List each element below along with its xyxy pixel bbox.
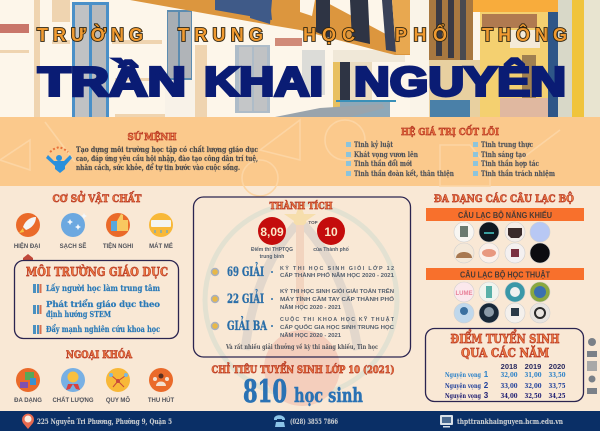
- enrolment target: [212, 362, 394, 410]
- extracurricular labels: QUY MÔ: [106, 396, 130, 404]
- panel: educational environment: [14, 260, 178, 338]
- table of admission scores: 1: [484, 370, 489, 379]
- extracurricular labels: CHẤT LƯỢNG: [52, 397, 94, 404]
- heading: extracurricular: NGOẠI KHÓA: [66, 347, 133, 361]
- panel: achievements: [194, 197, 410, 357]
- award row: third prize: NĂM HỌC 2020 - 2021: [280, 332, 341, 339]
- stat: top 10 in city: của Thành phố: [313, 246, 349, 253]
- heading: achievements: THÀNH TÍCH: [270, 200, 333, 212]
- values list: Tinh sáng tạo: [481, 150, 526, 159]
- award row: 22 prizes: 22 GIẢI: [227, 289, 264, 307]
- values list: Tinh thần đoàn kết, thân thiện: [354, 169, 454, 178]
- icon: network: [106, 368, 130, 392]
- table of admission scores: [445, 362, 566, 400]
- award row: 22 prizes: [212, 287, 394, 311]
- bar: academic clubs: [426, 268, 584, 280]
- table of admission scores: 2: [484, 381, 489, 390]
- table of admission scores: 2018: [501, 362, 517, 371]
- enrolment heading: CHỈ TIÊU TUYỂN SINH LỚP 10 (2021): [212, 362, 394, 376]
- bar: talent clubs: CÂU LẠC BỘ NĂNG KHIẾU: [458, 210, 552, 220]
- title: school type line: HỌC: [303, 25, 355, 45]
- enrolment number: 810: [243, 374, 287, 410]
- heading: admission scores: QUA CÁC NĂM: [461, 344, 549, 360]
- award row: third prize: [212, 315, 395, 339]
- table of admission scores: 32,50: [524, 392, 542, 400]
- table of admission scores: Nguyện vọng: [445, 382, 481, 390]
- book icons: [33, 284, 42, 334]
- heading: core values: HỆ GIÁ TRỊ CỐT LÕI: [401, 125, 499, 138]
- mission text: [76, 145, 258, 172]
- icon: air conditioner: [149, 213, 173, 237]
- title: school type line: [37, 24, 567, 45]
- table of admission scores: Nguyện vọng: [445, 392, 481, 400]
- award row: third prize: GIẢI BA: [227, 316, 268, 334]
- table of admission scores: 32,00: [500, 371, 518, 379]
- watermark emblem: [205, 203, 397, 406]
- mission text: Tạo dựng môi trường học tập có chất lượng giáo dục: [76, 145, 258, 154]
- title: school type line: TRƯỜNG: [37, 24, 143, 45]
- table of admission scores: 3: [484, 391, 489, 400]
- icon: puzzle: [16, 368, 40, 392]
- table of admission scores: 33,75: [548, 382, 566, 390]
- stat: top 10 in city: 10: [324, 225, 338, 239]
- environment list: Đẩy mạnh nghiên cứu khoa học: [46, 323, 160, 335]
- values list: Tinh thần trách nhiệm: [481, 169, 555, 178]
- table of admission scores: 31,00: [524, 371, 542, 379]
- title: school type line: THÔNG: [482, 24, 567, 45]
- table of admission scores: 33,00: [500, 382, 518, 390]
- title: school name: NGUYÊN: [354, 58, 566, 104]
- enrolment unit: học sinh: [294, 383, 363, 407]
- table of admission scores: 34,00: [500, 392, 518, 400]
- title: school name: KHAI: [204, 58, 323, 104]
- facility labels: HIỆN ĐẠI: [14, 242, 40, 250]
- icon: person with stars: [46, 147, 72, 173]
- heading: admission scores: [450, 328, 560, 360]
- icon: sparkling bubble: [61, 213, 87, 237]
- award row: third prize: CUỘC THI KHOA HỌC KỸ THUẬT: [280, 315, 395, 323]
- bullets: [346, 142, 478, 176]
- stat: top 10 in city: [308, 217, 349, 253]
- icon: group of people: [149, 368, 173, 392]
- stat: average exam score: Điểm thi THPTQG: [251, 246, 293, 253]
- bar: talent clubs: [426, 208, 584, 221]
- stat: average exam score: [251, 217, 293, 260]
- award row: 69 prizes: 69 GIẢI: [227, 262, 264, 280]
- facility labels: MÁT MẺ: [149, 243, 173, 250]
- STEM side icons: [587, 338, 597, 394]
- award row: 69 prizes: KỲ THI HỌC SINH GIỎI LỚP 12: [280, 264, 394, 272]
- values list: Khát vọng vươn lên: [354, 150, 418, 159]
- heading: clubs: ĐA DẠNG CÁC CÂU LẠC BỘ: [434, 193, 574, 205]
- panel: clubs: [426, 193, 584, 323]
- values list: Tinh trung thực: [481, 140, 533, 149]
- environment list: định hướng STEM: [46, 309, 111, 320]
- note: Và rất nhiều giải thưởng về kỳ thi năng khiếu, Tin học: [225, 343, 378, 351]
- extracurricular labels: [14, 396, 174, 404]
- table of admission scores: 34,25: [548, 392, 566, 400]
- heading: facilities: CƠ SỞ VẬT CHẤT: [52, 190, 142, 205]
- award row: 22 prizes: NĂM HỌC 2020 - 2021: [280, 304, 341, 311]
- icon: rocket: [16, 213, 40, 237]
- heading: mission: SỨ MỆNH: [128, 131, 177, 143]
- extracurricular labels: ĐA DẠNG: [14, 398, 42, 404]
- talent club logos: [454, 222, 550, 263]
- title: school type line: TRUNG: [178, 25, 263, 45]
- heading: educational environment: MÔI TRƯỜNG GIÁO DỤC: [26, 263, 168, 279]
- academic club logos: [454, 282, 550, 323]
- title: school type line: PHỔ: [395, 24, 447, 45]
- footer bar: [0, 411, 600, 431]
- panel: mission: [46, 131, 258, 173]
- environment list: Phát triển giáo dục theo: [46, 298, 160, 310]
- mission text: cao, đáp ứng yêu cầu hội nhập, đào tạo công dân trí tuệ,: [76, 154, 258, 163]
- icon: small red house: [23, 254, 33, 261]
- panel: core values: [346, 125, 555, 178]
- table of admission scores: 32,00: [524, 382, 542, 390]
- table of admission scores: 2019: [525, 362, 541, 371]
- icon: thumbs up: [106, 213, 130, 237]
- stat: top 10 in city: TOP: [308, 220, 318, 225]
- panel: admission scores: [426, 328, 584, 402]
- website: thpttrankhainguyen.hcm.edu.vn: [457, 417, 563, 426]
- award row: third prize: CẤP QUỐC GIA HỌC SINH TRUNG HỌC: [280, 324, 394, 331]
- stat: average exam score: trung bình: [260, 254, 284, 260]
- panel: facilities: [14, 190, 173, 250]
- facility labels: TIỆN NGHI: [103, 242, 133, 250]
- bar: academic clubs: CÂU LẠC BỘ HỌC THUẬT: [460, 270, 550, 280]
- facility labels: [14, 242, 173, 250]
- award row: 69 prizes: CẤP THÀNH PHỐ NĂM HỌC 2020 - 2021: [280, 272, 394, 279]
- academic club logos: LUME: [456, 291, 472, 297]
- orange mission and values band: [0, 117, 600, 196]
- title: school name: [38, 58, 566, 104]
- heading: admission scores: ĐIỂM TUYỂN SINH: [450, 328, 560, 346]
- header photo of the school: [0, 0, 600, 117]
- icon: location pin: [22, 414, 34, 429]
- table of admission scores: 2020: [549, 362, 565, 371]
- icon: telephone: [274, 415, 285, 427]
- environment list: [46, 282, 160, 335]
- icon: medal: [61, 368, 85, 392]
- environment list: Lấy người học làm trung tâm: [46, 282, 160, 294]
- values list: [354, 140, 555, 178]
- values list: Tinh thần đổi mới: [354, 159, 412, 168]
- icon: monitor: [440, 415, 453, 428]
- extracurricular labels: THU HÚT: [148, 397, 174, 404]
- facility labels: SẠCH SẼ: [60, 243, 86, 250]
- address: 225 Nguyễn Tri Phương, Phường 9, Quận 5: [37, 417, 172, 426]
- table of admission scores: 33,50: [548, 371, 566, 379]
- stat: average exam score: 8,09: [260, 225, 284, 239]
- mission text: nhân cách, sức khỏe, để tự tin bước vào cuộc sống.: [76, 163, 240, 172]
- award row: 22 prizes: MÁY TÍNH CẦM TAY CẤP THÀNH PHỐ: [280, 295, 394, 303]
- values list: Tinh thần hợp tác: [481, 159, 539, 168]
- title: school name: TRẦN: [38, 58, 186, 104]
- award row: 69 prizes: [212, 262, 394, 280]
- table of admission scores: Nguyện vọng: [445, 371, 481, 379]
- values list: Tinh kỷ luật: [354, 140, 393, 149]
- award row: 22 prizes: KỲ THI HỌC SINH GIỎI GIẢI TOÁN TRÊN: [280, 287, 394, 295]
- panel: extracurricular: [14, 347, 174, 404]
- phone number: (028) 3855 7866: [290, 417, 338, 426]
